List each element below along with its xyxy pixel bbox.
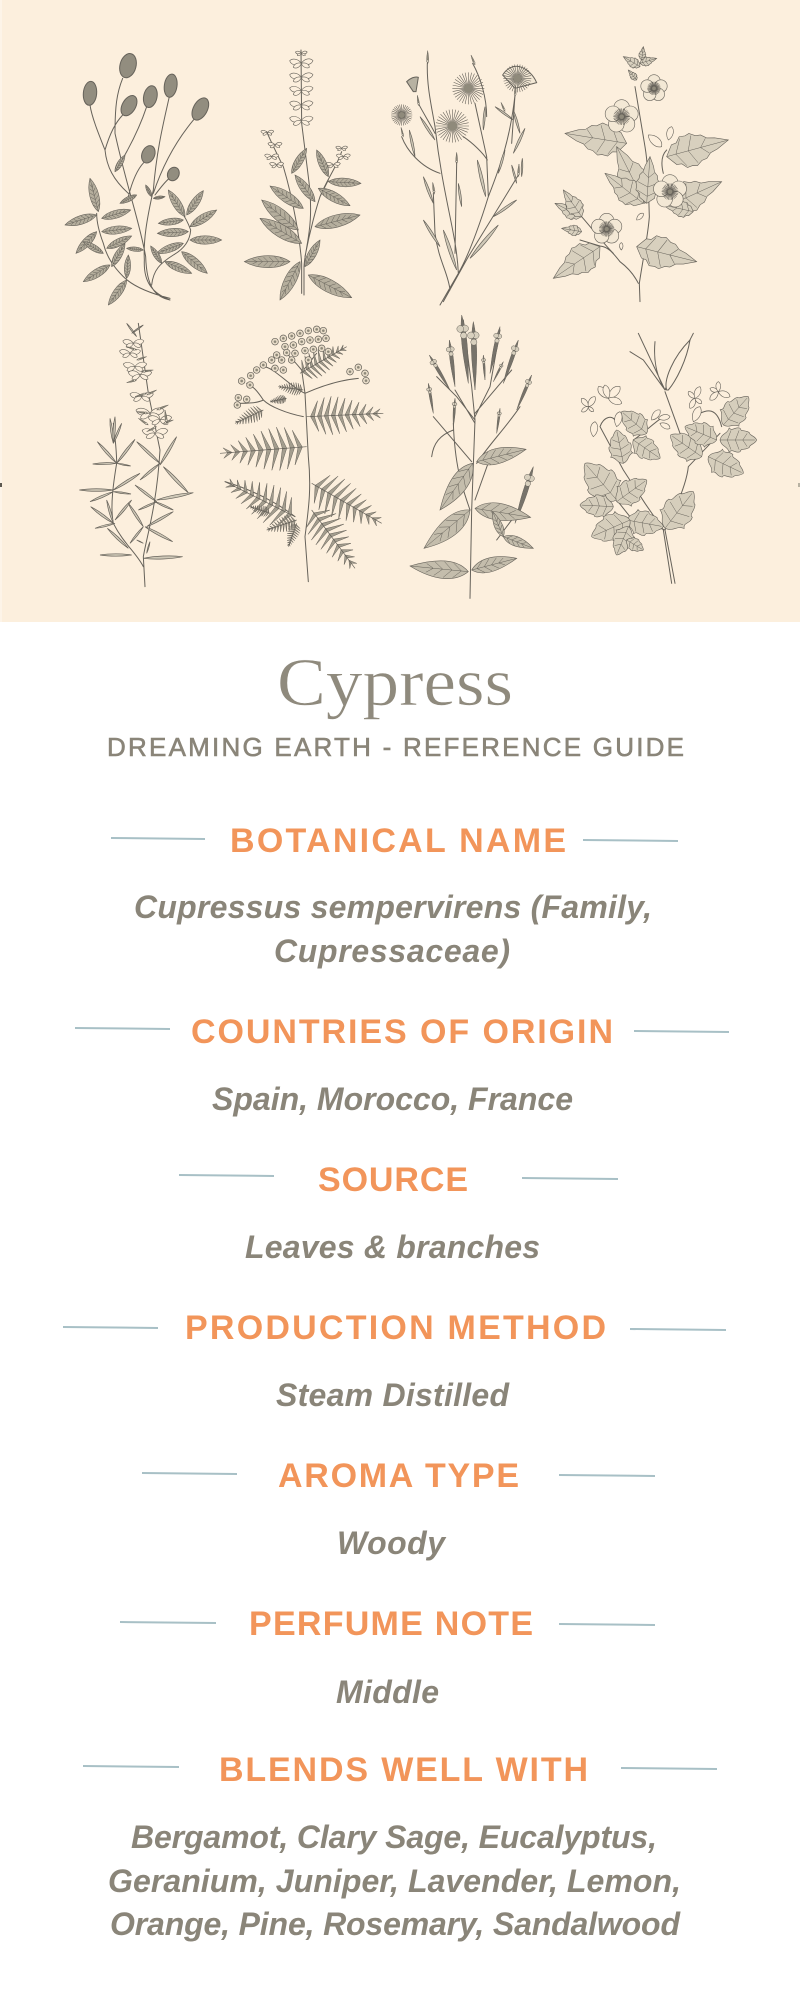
section: perfume note: PERFUME NOTE — [249, 1605, 533, 1643]
value: perfume note: Middle — [336, 1674, 439, 1710]
plant: burnet with oval flower heads — [64, 52, 222, 307]
value: countries of origin: Spain, Morocco, France — [212, 1081, 573, 1117]
plant: cornflower — [391, 51, 537, 305]
value: source: Leaves & branches — [245, 1229, 540, 1265]
section: blends well with — [83, 1751, 717, 1942]
section: production method: PRODUCTION METHOD — [185, 1309, 606, 1347]
plant: tansy with feathery fronds — [216, 326, 392, 582]
section: production method — [63, 1309, 726, 1413]
plant: celandine with lobed leaves — [573, 333, 758, 583]
section: perfume note — [120, 1605, 655, 1710]
value: aroma type: Woody — [337, 1525, 447, 1561]
value: botanical name: Cupressaceae) — [274, 933, 510, 969]
value: blends well with: Orange, Pine, Rosemary, Sandalwood — [110, 1906, 681, 1942]
plant: verbena with tall spikes — [409, 314, 538, 598]
subtitle: DREAMING EARTH - REFERENCE GUIDE — [107, 732, 684, 762]
section: countries of origin: COUNTRIES OF ORIGIN — [191, 1013, 613, 1051]
section: botanical name: BOTANICAL NAME — [230, 822, 566, 860]
plant: hyssop with narrow leaves — [79, 323, 194, 587]
value: blends well with: Bergamot, Clary Sage, Eucalyptus, — [131, 1819, 657, 1855]
section: botanical name — [111, 822, 678, 969]
section: aroma type — [142, 1457, 655, 1561]
plant: sage with flower spike — [244, 50, 362, 303]
title: Cypress — [277, 644, 513, 720]
panel: botanical illustrations — [0, 0, 800, 622]
section: aroma type: AROMA TYPE — [278, 1457, 519, 1495]
section: source: SOURCE — [318, 1161, 468, 1199]
value: botanical name: Cupressus sempervirens (Family, — [134, 889, 652, 925]
section: countries of origin — [75, 1013, 729, 1117]
value: production method: Steam Distilled — [276, 1377, 510, 1413]
section: source — [179, 1161, 618, 1265]
value: blends well with: Geranium, Juniper, Lavender, Lemon, — [108, 1863, 681, 1899]
section: blends well with: BLENDS WELL WITH — [219, 1751, 588, 1789]
plant: mallow with round flowers — [545, 46, 733, 302]
